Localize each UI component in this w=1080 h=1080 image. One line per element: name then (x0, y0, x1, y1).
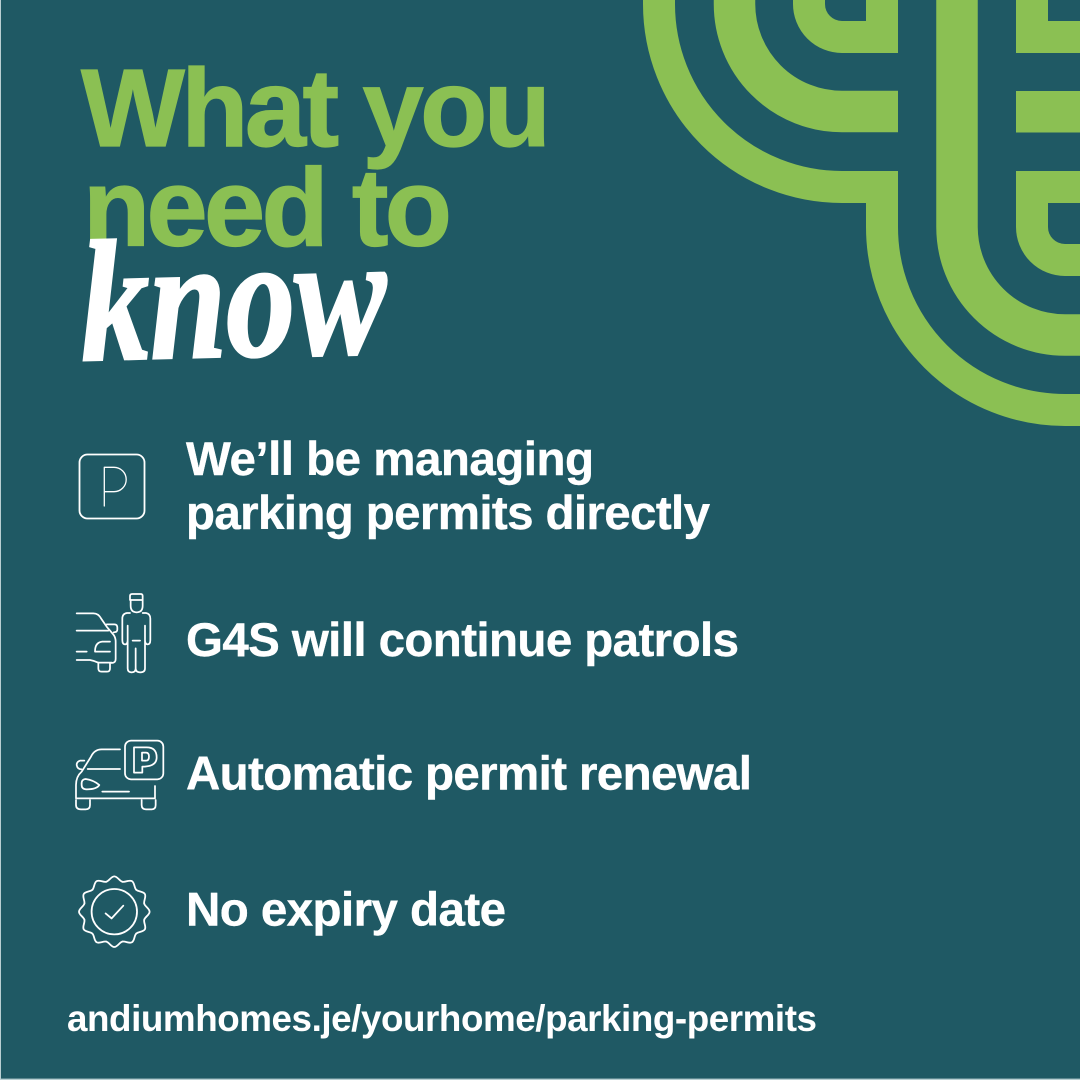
text: managing permits line 2: parking permits directly (186, 487, 711, 540)
title line 2: need to (83, 147, 452, 270)
text: G4S patrols: G4S will continue patrols (186, 614, 739, 667)
icon: guard and car (77, 594, 150, 672)
icon: car with parking sign (76, 741, 163, 809)
title script word: know (78, 200, 390, 398)
title line 1: What you (81, 47, 551, 170)
item: automatic renewal (76, 741, 752, 809)
text: automatic renewal: Automatic permit renewal (186, 747, 752, 800)
item: no expiry (79, 876, 506, 947)
icon: parking sign (80, 454, 144, 518)
item: G4S patrols (77, 594, 739, 672)
icon: badge with check (79, 876, 150, 947)
title (78, 47, 551, 398)
text: managing permits: We’ll be managing (186, 433, 594, 486)
decorative green concentric line graphic (659, 0, 1080, 410)
website link: andiumhomes.je/yourhome/parking-permits (67, 998, 817, 1039)
item: managing permits (80, 433, 711, 540)
text: no expiry: No expiry date (186, 883, 506, 936)
